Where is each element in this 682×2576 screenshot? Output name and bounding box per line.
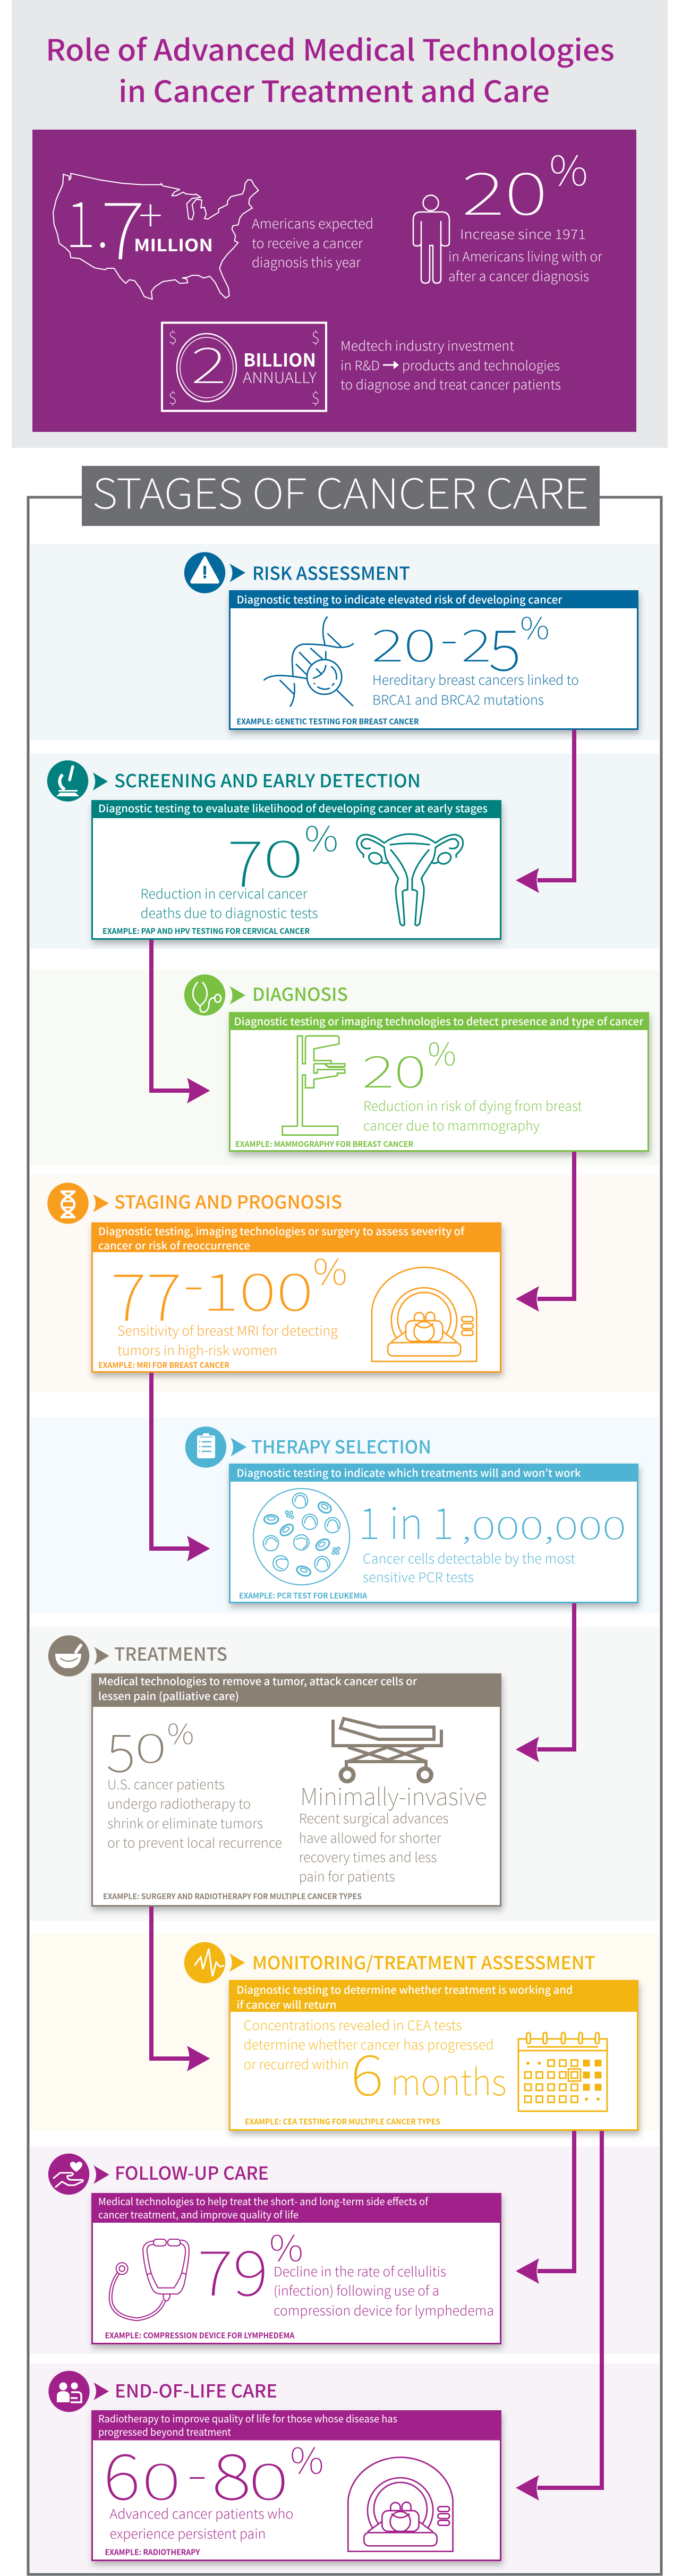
icon: banknote xyxy=(162,323,326,411)
text: advanced cancer patients: Advanced cancer patients who xyxy=(109,2504,293,2523)
text: decline in cellulitis: (infection) following use of a xyxy=(274,2281,439,2300)
card: diagnosis xyxy=(229,1012,649,1151)
heading: monitoring: MONITORING/TREATMENT ASSESSMENT xyxy=(252,1949,595,1975)
panel: follow-up care xyxy=(30,2146,659,2354)
text: hereditary breast cancers: BRCA1 and BRCA2 mutations xyxy=(372,690,544,709)
text: advanced cancer patients xyxy=(109,2504,293,2543)
stat: 60-80 percent xyxy=(104,2427,324,2518)
card header text: Medical technologies to help treat the short- and long-term side effects of xyxy=(98,2194,429,2208)
text: sensitivity of breast MRI: tumors in high-risk women xyxy=(117,1340,277,1359)
icon: heartbeat line xyxy=(184,1942,225,1983)
text: increase since 1971: in Americans living with or xyxy=(448,246,603,266)
icon: chevron xyxy=(231,1438,246,1457)
text: advanced cancer patients: experience persistent pain xyxy=(109,2523,266,2543)
frame: stages of cancer care xyxy=(28,497,661,2574)
text: reduction in cervical cancer: deaths due to diagnostic tests xyxy=(140,903,318,922)
stat: 70 percent: % xyxy=(304,811,338,861)
card header text xyxy=(98,1223,465,1253)
title xyxy=(46,27,615,110)
card header text: Radiotherapy to improve quality of life for those whose disease has xyxy=(98,2411,397,2426)
card header text: Diagnostic testing to indicate which treatments will and won’t work xyxy=(237,1465,581,1480)
card header text: Diagnostic testing to indicate elevated risk of developing cancer xyxy=(237,591,562,607)
stat: 77-100 percent: 100 xyxy=(202,1251,313,1325)
stat: 60-80 percent: 6 xyxy=(104,2427,140,2518)
stat: 20-25 percent: 5 xyxy=(489,605,521,687)
example label: EXAMPLE: CEA TESTING FOR MULTIPLE CANCER TYPES xyxy=(245,2116,440,2127)
card header text xyxy=(237,1982,573,2012)
text: radiotherapy: U.S. cancer patients xyxy=(107,1774,225,1793)
stat: 6 months: months xyxy=(391,2053,507,2106)
stat: 1.7+ million: MILLION xyxy=(134,232,213,257)
stat: 20 percent: % xyxy=(549,139,588,198)
stat: 50 percent: 0 xyxy=(135,1716,167,1774)
text: radiotherapy: undergo radiotherapy to xyxy=(107,1793,251,1813)
text: cancer cells detectable: Cancer cells detectable by the most xyxy=(363,1549,575,1568)
arrow: risk to screening xyxy=(516,730,574,893)
stat: 1 in 1,000,000: ,000,000 xyxy=(461,1503,626,1548)
text: hereditary breast cancers: Hereditary breast cancers linked to xyxy=(372,670,579,689)
icon: radiotherapy scanner xyxy=(348,2458,453,2552)
card header text: cancer or risk of reoccurrence xyxy=(98,1237,250,1253)
card: end-of-life care xyxy=(91,2410,501,2561)
stat: 60-80 percent: 8 xyxy=(212,2427,251,2518)
stat: 79 percent xyxy=(198,2220,303,2314)
icon: MRI scanner xyxy=(372,1268,476,1362)
text: CEA tests: or recurred within xyxy=(244,2054,349,2073)
card header text: cancer treatment, and improve quality of life xyxy=(98,2207,299,2222)
icon: warning triangle xyxy=(184,552,225,593)
card header text: Diagnostic testing to evaluate likelihood of developing cancer at early stages xyxy=(98,800,488,815)
heading: screening: SCREENING AND EARLY DETECTION xyxy=(114,767,421,793)
text: medtech investment: products and technologies xyxy=(402,355,560,375)
example label: EXAMPLE: MAMMOGRAPHY FOR BREAST CANCER xyxy=(235,1138,413,1150)
icon: hand with heart xyxy=(48,2154,89,2195)
stat: 77-100 percent: % xyxy=(313,1244,347,1295)
card header text xyxy=(98,2411,397,2439)
card: staging xyxy=(91,1222,501,1372)
text: surgical advances: Recent surgical advances xyxy=(299,1808,449,1827)
stat: 60-80 percent: 0 xyxy=(142,2442,181,2514)
card header text: Diagnostic testing to determine whether treatment is working and xyxy=(237,1982,573,1997)
text: surgical advances xyxy=(299,1808,449,1886)
text: surgical advances: recovery times and less xyxy=(299,1847,437,1866)
text: increase since 1971 xyxy=(448,224,603,285)
icon: hospital stretcher xyxy=(333,1719,441,1781)
text: sensitivity of breast MRI: Sensitivity of breast MRI for detecting xyxy=(117,1321,338,1340)
stat: 6 months: 6 xyxy=(351,2031,383,2112)
example label: EXAMPLE: RADIOTHERAPY xyxy=(105,2547,200,2558)
icon: stethoscope badge xyxy=(184,974,225,1016)
text: radiotherapy: shrink or eliminate tumors xyxy=(107,1814,263,1833)
icon: cells in petri dish xyxy=(253,1489,349,1585)
text: reduction in risk of dying: cancer due to mammography xyxy=(363,1116,540,1135)
stat: 60-80 percent: - xyxy=(187,2436,207,2505)
icon: calendar xyxy=(518,2033,607,2111)
icon: chevron xyxy=(93,2382,109,2400)
example label: EXAMPLE: SURGERY AND RADIOTHERAPY FOR MULTIPLE CANCER TYPES xyxy=(103,1891,362,1902)
text: americans expected: diagnosis this year xyxy=(252,252,361,271)
panel: staging and prognosis xyxy=(30,1175,659,1392)
icon: chevron xyxy=(93,1194,109,1212)
icon: mortar and pestle xyxy=(48,1635,89,1677)
card header text xyxy=(98,1673,417,1703)
text: reduction in risk of dying xyxy=(363,1096,582,1135)
card header text: Medical technologies to remove a tumor, attack cancer cells or xyxy=(98,1673,417,1688)
text: decline in cellulitis xyxy=(274,2262,494,2320)
text: radiotherapy xyxy=(107,1774,282,1852)
stat: 1.7+ million xyxy=(65,167,213,283)
panel: key statistics xyxy=(32,130,636,432)
stat: 1.7+ million: 1. xyxy=(65,174,109,266)
icon: banknote: ANNUALLY xyxy=(243,367,317,388)
stat: 20 percent xyxy=(462,139,588,232)
text: radiotherapy: or to prevent local recurrence xyxy=(107,1833,282,1852)
text: sensitivity of breast MRI xyxy=(117,1321,338,1359)
text: medtech investment: to diagnose and treat cancer patients xyxy=(340,375,561,394)
card: risk assessment xyxy=(229,590,638,729)
text: medtech investment: in R&D xyxy=(340,355,380,375)
arrow: diagnosis to staging xyxy=(516,1152,574,1312)
icon: banknote: $ xyxy=(168,325,177,348)
stat: 20-25 percent: 20 xyxy=(371,610,436,674)
icon: microscope xyxy=(47,760,88,802)
card: therapy selection xyxy=(229,1464,638,1602)
stat: 77-100 percent: - xyxy=(183,1243,204,1317)
panel: diagnosis xyxy=(30,970,659,1166)
stat: 60-80 percent: 0 xyxy=(249,2442,288,2514)
text: hereditary breast cancers xyxy=(372,670,579,709)
arrow: monitoring to follow-up xyxy=(516,2131,574,2284)
text: medtech investment: Medtech industry investment xyxy=(340,336,514,355)
panel: overview header xyxy=(12,0,668,448)
stat: 1 in 1,000,000 xyxy=(359,1489,626,1552)
icon: DNA helix xyxy=(47,1183,89,1224)
panel: therapy selection xyxy=(30,1417,659,1613)
icon: DNA under magnifier xyxy=(264,617,353,706)
arrow: monitoring to end-of-life xyxy=(516,2131,602,2501)
panel: monitoring and treatment assessment xyxy=(30,1934,659,2130)
stat: 1 in 1,000,000: 1 in 1 xyxy=(359,1489,454,1552)
panel: treatments xyxy=(30,1627,659,1921)
stat: 70 percent: 7 xyxy=(227,813,263,905)
stat: 50 percent xyxy=(106,1712,194,1787)
heading: end-of-life care: END-OF-LIFE CARE xyxy=(115,2377,277,2403)
stat: 20-25 percent: % xyxy=(520,605,549,648)
text: medtech investment xyxy=(340,336,561,394)
stat: 77-100 percent: 77 xyxy=(111,1245,182,1340)
text: decline in cellulitis: Decline in the rate of cellulitis xyxy=(274,2262,446,2281)
example label: EXAMPLE: GENETIC TESTING FOR BREAST CANCER xyxy=(237,716,419,727)
text: increase since 1971: Increase since 1971 xyxy=(460,224,586,243)
text: CEA tests: Concentrations revealed in CEA tests xyxy=(244,2016,462,2035)
icon: chevron xyxy=(93,2165,109,2184)
heading: stages of cancer care: STAGES OF CANCER CARE xyxy=(92,462,589,521)
stat: 77-100 percent xyxy=(111,1243,347,1340)
example label: EXAMPLE: PCR TEST FOR LEUKEMIA xyxy=(239,1590,368,1601)
text: minimally-invasive: Minimally-invasive xyxy=(300,1778,487,1812)
text: americans expected: to receive a cancer xyxy=(252,233,363,252)
text: surgical advances: have allowed for shorter xyxy=(299,1828,442,1847)
icon: chevron xyxy=(229,986,245,1005)
stat: 20-25 percent xyxy=(371,603,549,687)
icon: mammography machine xyxy=(283,1036,345,1135)
text: increase since 1971: after a cancer diagnosis xyxy=(448,266,589,285)
stat: 50 percent: % xyxy=(167,1712,194,1753)
panel: end-of-life care xyxy=(30,2364,659,2572)
icon: chevron xyxy=(229,1953,245,1972)
text: cancer cells detectable: sensitive PCR tests xyxy=(363,1567,474,1586)
card header text: Diagnostic testing or imaging technologies to detect presence and type of cancer xyxy=(234,1013,644,1028)
icon: clipboard xyxy=(185,1426,226,1468)
icon: chevron xyxy=(229,564,245,582)
heading: risk assessment: RISK ASSESSMENT xyxy=(252,559,410,585)
card header text: Diagnostic testing, imaging technologies or surgery to assess severity of xyxy=(98,1223,465,1238)
panel: risk assessment xyxy=(30,544,659,740)
stat: 70 percent xyxy=(227,811,338,905)
heading: therapy selection: THERAPY SELECTION xyxy=(251,1433,431,1459)
text: reduction in cervical cancer: Reduction in cervical cancer xyxy=(140,884,308,903)
example label: EXAMPLE: COMPRESSION DEVICE FOR LYMPHEDEMA xyxy=(105,2330,295,2341)
arrow: treatments to monitoring xyxy=(151,1907,210,2071)
icon: two people xyxy=(48,2371,90,2412)
text: decline in cellulitis: compression device for lymphedema xyxy=(274,2301,494,2320)
title: Role of Advanced Medical Technologies xyxy=(46,27,615,69)
icon: person xyxy=(413,195,449,283)
heading: diagnosis: DIAGNOSIS xyxy=(252,980,348,1006)
stat: 79 percent: % xyxy=(269,2220,303,2272)
text: cancer cells detectable xyxy=(363,1549,575,1586)
stat: 20 percent: % xyxy=(428,1030,456,1074)
icon: chevron xyxy=(92,772,108,790)
text: americans expected xyxy=(252,214,373,271)
icon: banknote: 2 xyxy=(191,326,226,397)
heading: staging and prognosis: STAGING AND PROGNOSIS xyxy=(114,1188,342,1214)
icon: banknote: $ xyxy=(168,385,177,409)
text: surgical advances: pain for patients xyxy=(299,1867,395,1886)
stat: 20 percent: 20 xyxy=(462,147,548,232)
stat: 60-80 percent: % xyxy=(290,2433,324,2484)
stat: 1.7+ million: + xyxy=(139,178,163,245)
text: americans expected: Americans expected xyxy=(252,214,373,233)
icon: banknote: $ xyxy=(311,385,320,409)
card: monitoring xyxy=(229,1980,638,2130)
text: reduction in risk of dying: Reduction in risk of dying from breast xyxy=(363,1096,582,1115)
stat: 20 percent xyxy=(362,1030,456,1100)
card header text: progressed beyond treatment xyxy=(98,2425,231,2439)
card header text: lessen pain (palliative care) xyxy=(98,1688,239,1703)
icon: uterus xyxy=(357,834,463,925)
icon: banknote: $ xyxy=(311,325,320,348)
icon: banknote: BILLION xyxy=(243,346,316,372)
arrow: staging to therapy xyxy=(151,1373,210,1561)
icon: stethoscope xyxy=(109,2239,189,2320)
example label: EXAMPLE: PAP AND HPV TESTING FOR CERVICAL CANCER xyxy=(103,925,310,937)
title: in Cancer Treatment and Care xyxy=(118,68,550,110)
stat: 20-25 percent: - xyxy=(440,603,458,667)
stat: 6 months xyxy=(351,2031,507,2112)
stat: 50 percent: 5 xyxy=(106,1712,135,1787)
card: screening xyxy=(91,800,501,939)
arrow: screening to diagnosis xyxy=(151,940,210,1103)
stat: 79 percent: 79 xyxy=(198,2223,268,2314)
arrow: therapy to treatments xyxy=(516,1603,574,1762)
text: reduction in cervical cancer xyxy=(140,884,318,922)
heading: treatments: TREATMENTS xyxy=(114,1640,227,1666)
icon: US map xyxy=(53,173,259,299)
stat: 1.7+ million: 7 xyxy=(101,167,146,283)
stat: 20 percent: 20 xyxy=(362,1037,426,1100)
stat: 70 percent: 0 xyxy=(263,818,304,892)
stat: 20-25 percent: 2 xyxy=(461,610,491,674)
example label: EXAMPLE: MRI FOR BREAST CANCER xyxy=(98,1359,229,1371)
card: treatments xyxy=(91,1673,501,1906)
card: follow-up care xyxy=(91,2193,501,2344)
card header text xyxy=(98,2194,429,2222)
panel: screening and early detection xyxy=(30,753,659,949)
icon: chevron xyxy=(94,1647,109,1665)
text: CEA tests: determine whether cancer has progressed xyxy=(244,2035,494,2054)
card header text: if cancer will return xyxy=(237,1996,337,2012)
text: CEA tests xyxy=(244,2016,494,2073)
heading: follow-up care: FOLLOW-UP CARE xyxy=(115,2159,269,2185)
